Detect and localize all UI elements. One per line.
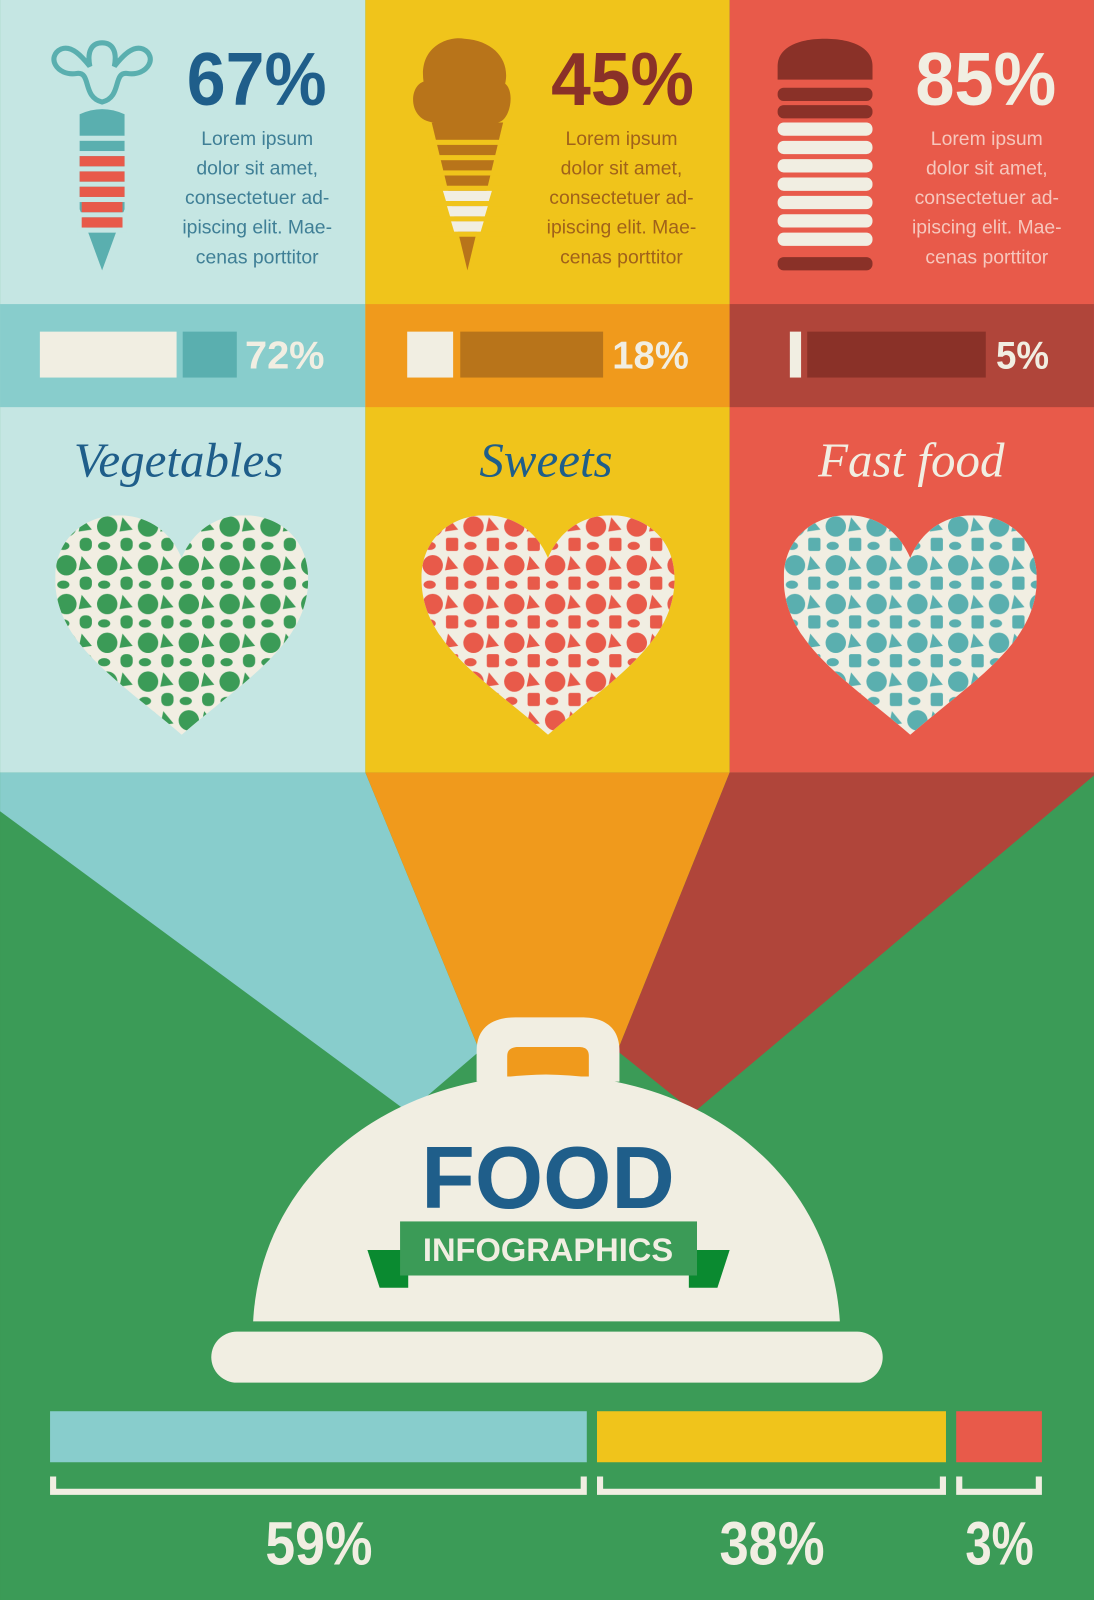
text block: cenas porttitor xyxy=(560,246,683,268)
text block: dolor sit amet, xyxy=(926,157,1048,179)
icon: ice cream xyxy=(413,38,511,270)
ribbon xyxy=(367,1221,730,1288)
beams xyxy=(0,772,1094,1112)
text block: ipiscing elit. Mae- xyxy=(547,217,696,239)
text block: dolor sit amet, xyxy=(561,157,682,179)
bar 18% xyxy=(407,332,689,378)
text block: consectetuer ad- xyxy=(185,187,329,209)
heart: fast food xyxy=(784,515,1037,735)
heart: vegetables xyxy=(55,515,308,735)
handle xyxy=(477,1017,619,1082)
panel: fast food xyxy=(730,0,1094,772)
text block: Lorem ipsum xyxy=(201,128,313,150)
stat 67%: 67% xyxy=(187,38,327,122)
text block: consectetuer ad- xyxy=(549,187,694,209)
heart: sweets xyxy=(421,515,675,735)
bottom bar chart: 3% xyxy=(965,1509,1034,1577)
icon: burger xyxy=(778,39,873,270)
bar 5% xyxy=(790,332,1049,378)
text block: dolor sit amet, xyxy=(196,157,318,179)
dome xyxy=(253,1074,840,1321)
bar 5%: 5% xyxy=(996,334,1049,377)
bar 18%: 18% xyxy=(612,334,689,377)
heading: Sweets: Sweets xyxy=(479,433,613,488)
text block: cenas porttitor xyxy=(196,246,319,268)
ribbon: INFOGRAPHICS xyxy=(423,1231,673,1268)
title FOOD: FOOD xyxy=(421,1129,675,1227)
bar 72% xyxy=(40,332,325,378)
panel: sweets xyxy=(365,0,730,772)
stat 85%: 85% xyxy=(915,38,1056,122)
panel: vegetables xyxy=(0,0,365,772)
text block: ipiscing elit. Mae- xyxy=(912,217,1062,239)
text block: cenas porttitor xyxy=(925,246,1049,268)
bottom bar chart xyxy=(50,1411,1042,1577)
heading: Vegetables: Vegetables xyxy=(74,433,283,488)
text block: consectetuer ad- xyxy=(915,187,1059,209)
icon: carrot xyxy=(54,43,150,270)
stat 45%: 45% xyxy=(551,38,694,122)
text block: Lorem ipsum xyxy=(565,128,677,150)
cloche xyxy=(211,1017,883,1383)
bottom bar chart: 59% xyxy=(265,1509,373,1577)
plate xyxy=(211,1332,883,1383)
heading: Fast food: Fast food xyxy=(817,433,1005,488)
bottom bar chart: 38% xyxy=(719,1509,825,1577)
bar 72%: 72% xyxy=(245,334,325,377)
text block: ipiscing elit. Mae- xyxy=(182,217,332,239)
text block: Lorem ipsum xyxy=(931,128,1043,150)
